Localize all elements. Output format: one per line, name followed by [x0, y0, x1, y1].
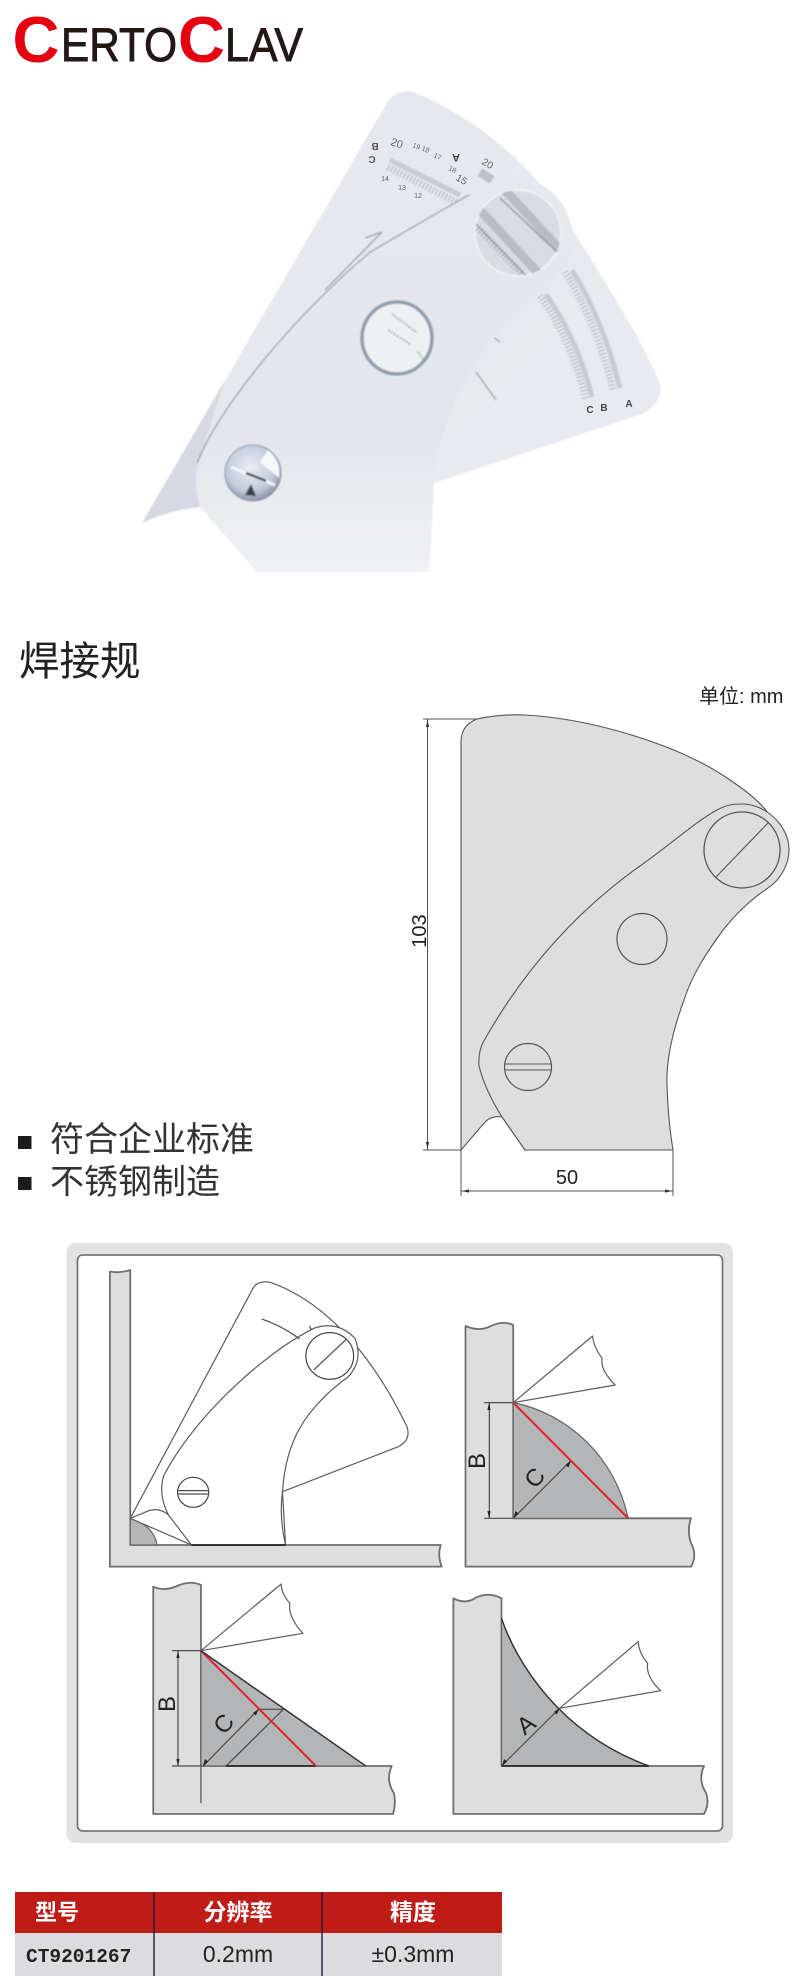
photo: scale letters: 18	[447, 165, 457, 175]
photo: screw slot	[231, 467, 275, 485]
diagram: flat fillet B and C	[153, 1583, 395, 1814]
photo: stainless steel welding gauge	[142, 92, 661, 572]
photo: shaded plate tip	[142, 380, 225, 523]
table header: 精度	[390, 1899, 436, 1925]
photo: front pivot arm	[196, 178, 573, 572]
diagram: convex fillet B and C	[464, 1323, 694, 1567]
photo: scale letters: C	[368, 153, 376, 164]
photo: scale letters: C	[586, 405, 594, 416]
diagram: convex fillet B and C: B	[464, 1453, 491, 1469]
table row	[15, 1933, 502, 1976]
photo: pivot screw	[225, 445, 281, 501]
diagram: convex fillet B and C: C	[519, 1463, 551, 1493]
photo: lens scale marks	[474, 190, 565, 278]
panel frame	[66, 1243, 733, 1843]
drawing: large screw	[704, 812, 780, 888]
dimension drawing	[409, 715, 789, 1196]
photo: screw shadow	[245, 484, 256, 496]
drawing: rear plate	[461, 715, 768, 1150]
photo: scale letters: B	[371, 140, 379, 151]
title: 焊接规	[19, 638, 140, 684]
logo: CertoClav: C	[12, 3, 59, 76]
logo: CertoClav	[12, 3, 304, 76]
photo: scale letters: 12	[414, 193, 422, 200]
photo: large lens window	[475, 190, 561, 276]
table header: 分辨率	[204, 1899, 272, 1925]
photo: rear scale plate	[142, 92, 661, 572]
logo: CertoClav: LAV	[225, 18, 304, 71]
table header: 型号	[35, 1900, 79, 1925]
drawing: width dimension	[461, 1150, 673, 1196]
diagram: gauge seated on weld	[110, 1270, 442, 1567]
unit note: 单位: mm	[699, 685, 783, 708]
table row: 0.2mm	[203, 1941, 273, 1967]
table header	[15, 1892, 502, 1933]
table: specifications	[15, 1892, 502, 1976]
photo: scale letters: B	[600, 403, 608, 414]
photo: scale letters: 17	[432, 152, 442, 162]
photo: middle window	[362, 302, 432, 374]
panel: usage diagrams	[66, 1243, 733, 1843]
label: 103: 103	[409, 914, 431, 948]
logo: CertoClav: ERTO	[61, 18, 177, 71]
photo: screw highlight	[260, 450, 280, 478]
drawing: height dimension	[423, 719, 477, 1150]
bullet 2: 不锈钢制造	[50, 1164, 220, 1202]
bullet 1: 符合企业标准	[50, 1121, 254, 1159]
drawing: lower screw	[504, 1044, 552, 1090]
photo: scale letters: 19 18	[411, 142, 430, 155]
drawing: front arm	[479, 804, 789, 1150]
bullet list	[18, 1121, 254, 1202]
diagram: concave fillet A	[453, 1595, 708, 1814]
photo: scale letters: A	[625, 399, 633, 410]
drawing: arrowheads	[426, 720, 672, 1193]
photo: scale letters: 20	[480, 157, 495, 172]
label: 50: 50	[556, 1167, 578, 1189]
logo: CertoClav: C	[178, 3, 225, 76]
photo: scale letters: 14	[381, 176, 389, 183]
diagram: flat fillet B and C: B	[154, 1696, 181, 1712]
diagram: flat fillet B and C: C	[208, 1709, 240, 1739]
drawing: large screw slot	[716, 823, 768, 877]
drawing: middle hole	[617, 914, 667, 964]
drawing: lower screw slot	[505, 1064, 552, 1070]
column separators	[154, 1892, 322, 1976]
photo: scale letters: 13	[398, 185, 406, 192]
table row: CT9201267	[26, 1946, 131, 1968]
photo: plate shadow edge	[198, 195, 470, 463]
photo: scale letters: A	[452, 151, 460, 163]
photo: weld sketch on plate	[325, 232, 500, 400]
photo: scale letters	[368, 136, 633, 416]
photo: scale letters: 20	[389, 136, 404, 152]
diagram: concave fillet A: A	[512, 1710, 541, 1741]
table row: ±0.3mm	[372, 1941, 454, 1967]
photo: scale letters: 15	[454, 173, 469, 188]
photo: rear plate scales	[390, 160, 620, 397]
